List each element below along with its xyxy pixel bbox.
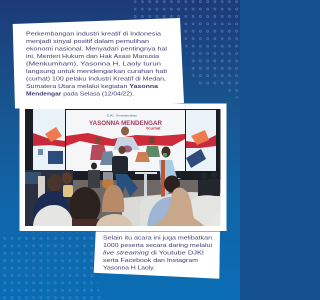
bottom paragraph <box>103 236 212 272</box>
table <box>135 172 157 174</box>
bottom paragraph: live streaming di Youtube DJKI <box>103 250 205 256</box>
photo: event stage and audience <box>25 109 221 227</box>
white chairs right <box>161 196 162 197</box>
right screen <box>186 110 216 171</box>
side guests right <box>198 172 220 196</box>
left audience <box>25 170 73 227</box>
presenters on screen <box>121 126 129 136</box>
top paragraph: ini, Menteri Hukum dan Hak Asasi Manusia <box>26 54 160 60</box>
stage wall <box>25 109 221 181</box>
center screen: DJKI · Kemenkumham <box>107 114 138 118</box>
foreground head <box>70 187 100 227</box>
center screen: #curhat <box>146 126 161 130</box>
background <box>0 0 240 300</box>
bottom paragraph: serta Facebook dan Instagram <box>103 258 198 264</box>
bottom paragraph: Yasonna H Laoly. <box>103 266 155 272</box>
bottom paragraph: 1000 peserta secara daring melalui <box>103 243 212 249</box>
speaker man <box>112 146 138 197</box>
standing guests center left <box>88 170 100 188</box>
speaker woman <box>159 146 181 197</box>
bottom text card <box>94 232 220 279</box>
top card overlap <box>15 100 184 108</box>
white chair left <box>33 205 73 226</box>
left screen <box>33 109 65 171</box>
top paragraph: Mendengar pada Selasa (12/04/22). <box>26 92 134 98</box>
center screen <box>66 110 185 171</box>
hijab woman center <box>96 179 133 227</box>
top paragraph: (curhat) 100 pelaku Industri Kreatif di Medan, <box>26 76 166 82</box>
top paragraph: Perkembangan industri kreatif di Indonesia <box>26 32 162 38</box>
dot pattern bottom left <box>0 232 101 300</box>
top paragraph: ekonomi nasional. Menyadari pentingnya hal <box>26 46 167 52</box>
screen title: YASONNA MENDENGAR <box>89 120 162 127</box>
man in blue shirt <box>147 176 193 227</box>
top paragraph: Sumatera Utara melalui kegiatan Yasonna <box>26 84 159 90</box>
floor <box>73 180 220 220</box>
top paragraph <box>26 32 167 98</box>
infographic canvas <box>0 0 240 300</box>
photo frame <box>20 104 226 231</box>
beige hijab woman right <box>153 188 205 227</box>
audience figure yellow shirt <box>62 172 73 197</box>
top paragraph: menjadi sinyal positif dalam pemulihan <box>26 39 149 45</box>
audience figure navy shirt <box>33 174 70 227</box>
bottom paragraph: Selain itu acara ini juga melibatkan <box>103 236 212 242</box>
top paragraph: langsung untuk mendengarkan curahan hati <box>26 69 167 75</box>
top text card <box>13 18 184 108</box>
dot pattern top right <box>134 0 240 98</box>
top paragraph: (Menkumham), Yasonna H. Laoly turun <box>26 62 161 68</box>
